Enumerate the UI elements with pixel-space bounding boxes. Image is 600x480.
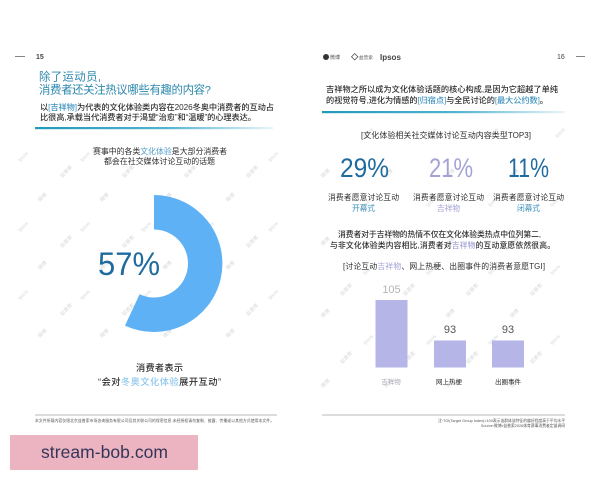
gradient divider: [35, 127, 273, 129]
infographic spread: Ipsos: [549, 195, 562, 208]
infographic spread: 微博: [444, 235, 456, 247]
infographic spread: Ipsos: [362, 333, 375, 346]
infographic spread: 微博: [319, 307, 331, 319]
infographic spread: 益普索: [338, 350, 354, 365]
infographic spread: Ipsos: [549, 263, 562, 276]
infographic spread: Ipsos: [140, 150, 153, 163]
infographic spread: 微博: [319, 235, 331, 247]
infographic spread: 益普索: [182, 302, 198, 317]
panel: left page: [15, 54, 277, 423]
infographic spread: Ipsos: [362, 195, 375, 208]
stats heading: [文化体验相关社交媒体讨论互动内容类型TOP3]: [361, 130, 531, 140]
infographic spread: Ipsos: [203, 150, 216, 163]
infographic spread: 微博: [98, 327, 110, 339]
bar chart: [376, 284, 524, 386]
infographic spread: 微博: [444, 307, 456, 319]
infographic spread: Ipsos: [17, 220, 30, 233]
footer rule: [322, 414, 565, 416]
infographic spread: Ipsos: [487, 126, 500, 139]
infographic spread: 益普索: [120, 164, 136, 179]
infographic spread: 益普索: [244, 164, 260, 179]
infographic spread: 微博: [508, 377, 520, 389]
panel: right page: [322, 53, 585, 428]
intro text: 的视觉符号,进化为情感的[归宿点]与全民讨论的[最大公约数]。: [326, 95, 548, 105]
explanatory text: 消费者对于吉祥物的热情不仅在文化体验类热点中位列第二,: [338, 229, 541, 239]
title: [39, 70, 211, 96]
infographic spread: 微博: [224, 191, 236, 203]
infographic spread: 微博: [382, 235, 394, 247]
infographic spread: Ipsos: [17, 150, 30, 163]
infographic spread: 微博: [224, 259, 236, 271]
bar: 出圈事件 93: 出圈事件: [495, 377, 522, 386]
infographic spread: Ipsos: [425, 333, 438, 346]
infographic spread: 益普索: [401, 282, 417, 297]
logos: Ipsos: [380, 53, 401, 62]
stat: 29%: 开幕式: [352, 203, 375, 213]
bar: 出圈事件 93: [492, 324, 524, 386]
intro text: [40, 102, 274, 122]
infographic spread: Ipsos: [79, 288, 92, 301]
donut caption: [98, 362, 221, 387]
bar: 吉祥物 105: 105: [382, 284, 401, 296]
page number 15: 15: [36, 54, 44, 61]
infographic spread: 益普索: [244, 302, 260, 317]
infographic spread: 微博: [161, 327, 173, 339]
infographic spread: Ipsos: [17, 288, 30, 301]
infographic spread: 益普索: [182, 164, 198, 179]
footer rule: [35, 414, 277, 416]
stat: 11%: 闭幕式: [517, 203, 540, 213]
infographic spread: Ipsos: [267, 220, 280, 233]
page number 16: [557, 54, 585, 61]
stat: 11%: [493, 153, 564, 213]
intro text: 吉祥物之所以成为文化体验话题的核心构成,是因为它超越了单纯: [326, 84, 558, 94]
infographic spread: 益普索: [464, 282, 480, 297]
infographic spread: 微博: [508, 235, 520, 247]
bar: 网上热梗 93: 93: [444, 324, 456, 336]
infographic spread: 微博: [319, 167, 331, 179]
infographic spread: 微博: [161, 191, 173, 203]
infographic spread: 微博: [98, 191, 110, 203]
infographic spread: Ipsos: [267, 150, 280, 163]
chart heading: [93, 146, 227, 166]
disclaimer: 本文件所载内容仅限北京益普索市场咨询服务有限公司及其关联公司的保密信息,未经授权请勿复制、披露、传播或以其他方式使用本文件。: [35, 418, 274, 423]
infographic spread: Ipsos: [425, 126, 438, 139]
intro text: 以[吉祥物]为代表的文化体验类内容在2026冬奥中消费者的互动占: [40, 102, 274, 112]
infographic spread: 益普索: [182, 234, 198, 249]
infographic spread: Ipsos: [79, 150, 92, 163]
infographic spread: 微博: [508, 307, 520, 319]
explanatory text: 与非文化体验类内容相比,消费者对吉祥物的互动意愿依然很高。: [330, 240, 555, 250]
infographic spread: 微博: [508, 167, 520, 179]
bar: 吉祥物 105: 吉祥物: [381, 377, 401, 386]
watermark label box: stream-bob.com: [41, 442, 168, 462]
infographic spread: 益普索: [401, 350, 417, 365]
bar: 出圈事件 93: 93: [502, 324, 514, 336]
page number 16: 16: [557, 54, 565, 61]
infographic spread: 益普索: [338, 282, 354, 297]
stat: 29%: 消费者愿意讨论互动: [328, 192, 399, 202]
stat: 21%: 消费者愿意讨论互动: [413, 192, 484, 202]
bar: 吉祥物 105: [376, 284, 408, 386]
infographic spread: 微博: [382, 307, 394, 319]
donut chart 57%: [98, 195, 222, 332]
infographic spread: Ipsos: [487, 263, 500, 276]
infographic spread: Ipsos: [203, 220, 216, 233]
infographic spread: Ipsos: [362, 126, 375, 139]
infographic spread: 益普索: [58, 234, 74, 249]
stat: 11%: 11%: [508, 153, 549, 183]
gradient divider: [322, 111, 565, 113]
value 57%: 57%: [98, 246, 160, 282]
infographic spread: 益普索: [464, 350, 480, 365]
logos: 益普索: [359, 54, 373, 61]
infographic spread: 益普索: [244, 234, 260, 249]
infographic spread: 益普索: [528, 282, 544, 297]
bar: 网上热梗 93: 网上热梗: [436, 377, 462, 386]
infographic spread: Ipsos: [549, 333, 562, 346]
infographic spread: 益普索: [58, 164, 74, 179]
infographic spread: Ipsos: [140, 288, 153, 301]
infographic spread: 微博: [382, 377, 394, 389]
infographic spread: 微博: [224, 327, 236, 339]
infographic spread: Ipsos: [79, 220, 92, 233]
intro text: [326, 84, 558, 105]
stat: 21%: 吉祥物: [437, 203, 460, 213]
infographic spread: 微博: [444, 377, 456, 389]
stat: 21%: [413, 153, 484, 213]
logos: [323, 53, 401, 62]
infographic spread: 益普索: [58, 302, 74, 317]
stat: 29%: [328, 153, 399, 213]
stat: 21%: 21%: [429, 153, 473, 183]
infographic spread: 微博: [161, 259, 173, 271]
infographic spread: 微博: [36, 259, 48, 271]
infographic spread: Ipsos: [554, 126, 567, 139]
source note: 注:TGI(Target Group Index)>100表示该群体该特征的偏好程度高于平均水平: [438, 418, 565, 423]
infographic spread: 微博: [36, 327, 48, 339]
stat: 11%: 消费者愿意讨论互动: [493, 192, 564, 202]
infographic spread: Ipsos: [203, 288, 216, 301]
chart heading: 都会在社交媒体讨论互动的话题: [104, 156, 215, 166]
donut caption: “会对冬奥文化体验展开互动”: [98, 376, 221, 387]
watermark label box: [10, 435, 198, 470]
infographic spread: Ipsos: [487, 195, 500, 208]
logos: 微博: [330, 54, 340, 61]
infographic spread: 微博: [444, 167, 456, 179]
bar: 网上热梗 93: [434, 324, 466, 386]
infographic spread: 微博: [36, 191, 48, 203]
infographic spread: Ipsos: [362, 263, 375, 276]
page number 15: [15, 54, 44, 61]
infographic spread: 微博: [98, 259, 110, 271]
donut caption: 消费者表示: [136, 362, 183, 373]
infographic spread: 益普索: [120, 302, 136, 317]
source note: Source:微博x益普索2026体育赛事消费者定量调研: [481, 423, 565, 428]
infographic spread: Ipsos: [140, 220, 153, 233]
infographic spread: 益普索: [120, 234, 136, 249]
infographic spread: 微博: [382, 167, 394, 179]
infographic spread: Ipsos: [425, 263, 438, 276]
bar chart heading: [讨论互动吉祥物、网上热梗、出圈事件的消费者意愿TGI]: [343, 261, 545, 271]
stat: 29%: 29%: [340, 153, 389, 183]
source note: [438, 418, 565, 428]
infographic spread: Ipsos: [267, 288, 280, 301]
title: 消费者还关注热议哪些有趣的内容?: [39, 82, 211, 96]
intro text: 比很高,承载当代消费者对于渴望“治愈”和“温暖”的心理表达。: [40, 112, 256, 122]
infographic spread: 益普索: [528, 350, 544, 365]
explanatory text: [330, 229, 555, 250]
infographic spread: Ipsos: [487, 333, 500, 346]
infographic spread: 微博: [319, 377, 331, 389]
chart heading: 赛事中的各类文化体验是大部分消费者: [93, 146, 227, 156]
title: 除了运动员,: [39, 70, 101, 84]
infographic spread: Ipsos: [425, 195, 438, 208]
